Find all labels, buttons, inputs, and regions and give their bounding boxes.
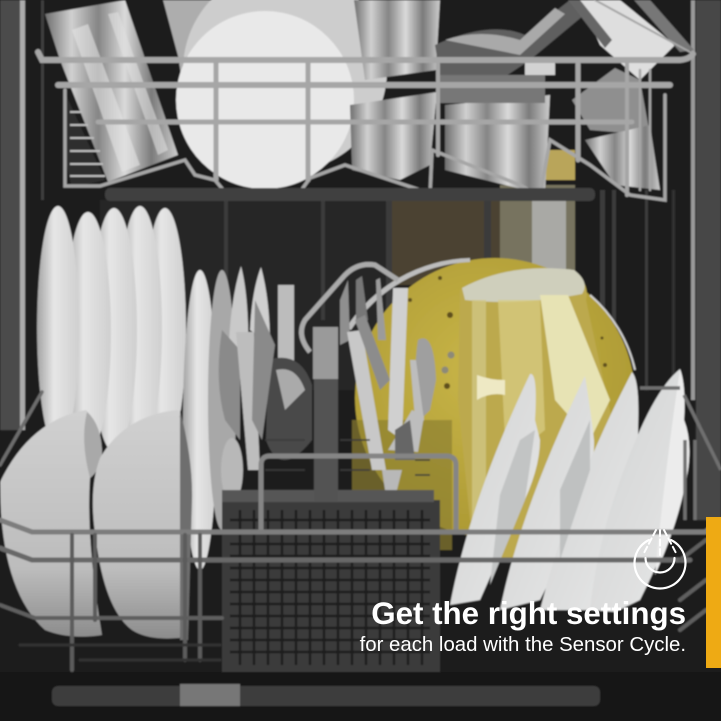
side walls [0,0,721,520]
cutlery [219,276,436,502]
caption heading: Get the right settings [371,596,686,631]
upper rack wires [38,0,693,200]
top loop handle [301,264,398,352]
basket handle [261,456,456,530]
plates rack left [37,206,294,570]
cutlery basket [222,264,456,672]
caption subtext: for each load with the Sensor Cycle. [360,634,686,656]
basket body [222,440,440,672]
centre post [313,327,338,379]
white cup right [580,0,675,80]
glass left [45,0,178,182]
tub floor [0,672,721,721]
yellow colander [346,258,635,550]
large glass [458,268,612,560]
icon: sensor spray [635,530,686,589]
top glasses centre [354,0,440,80]
rack tines right [640,388,721,520]
ribbed base left [65,95,105,188]
upper rack contents [45,0,694,195]
white plates [163,0,375,130]
upper rack support shelf [105,188,595,201]
lower rack wires [0,392,721,670]
bowls lower left [0,410,192,640]
slanted plates right [450,369,689,612]
accent bar [706,517,721,668]
